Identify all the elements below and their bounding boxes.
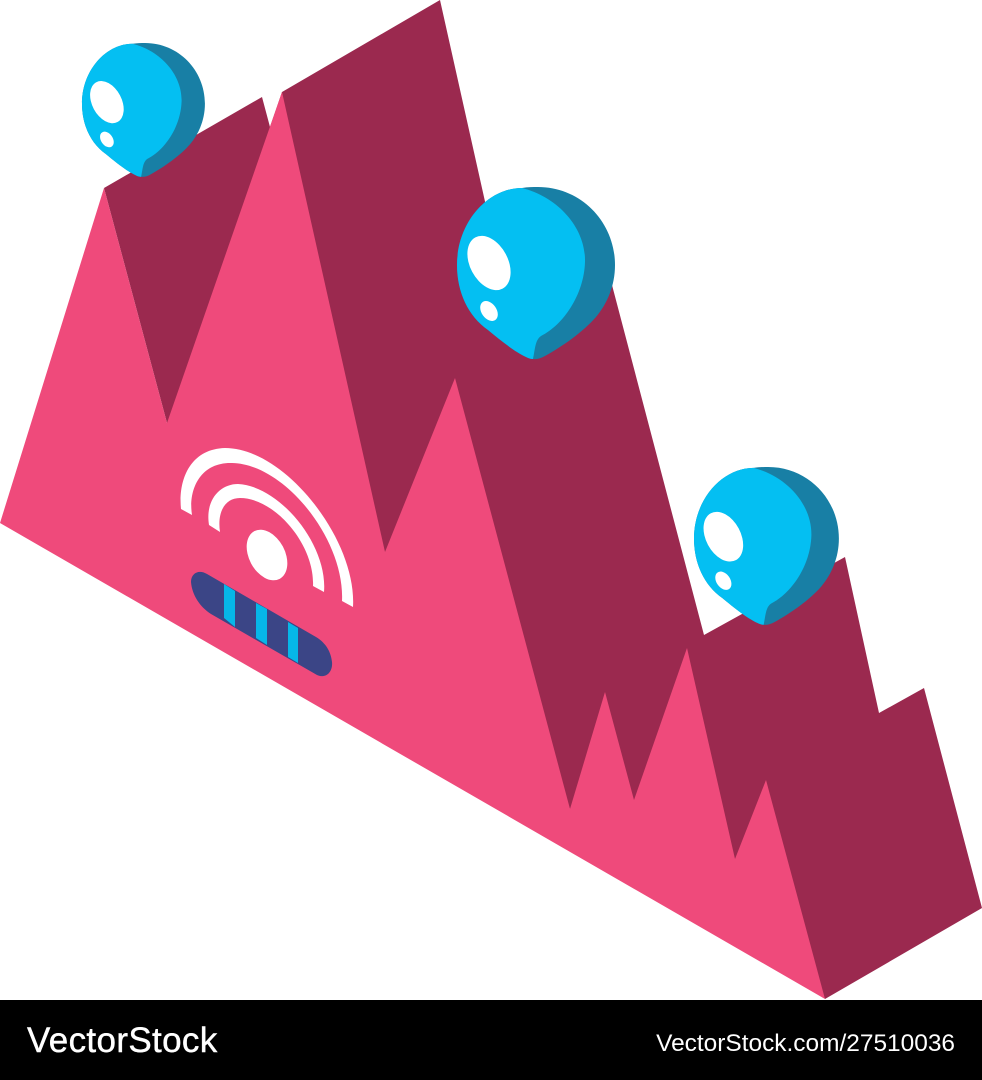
shadow side <box>457 187 615 359</box>
stripes <box>224 584 298 663</box>
icon: wifi signal <box>181 448 353 607</box>
image url: VectorStock.com/27510036 <box>656 1030 955 1057</box>
front <box>694 468 811 625</box>
highlights <box>459 228 519 324</box>
front <box>82 44 182 177</box>
bar body <box>191 572 332 676</box>
balloon marker 1 <box>82 43 205 177</box>
front <box>457 188 585 359</box>
balloon marker 2 <box>457 187 615 359</box>
shadow side <box>694 467 839 625</box>
middle arc <box>208 484 324 592</box>
balloon marker 3 <box>694 467 839 625</box>
centre dot <box>238 523 296 587</box>
chart front face: pink mountain <box>0 92 825 999</box>
highlights <box>83 75 131 150</box>
highlights <box>695 505 751 593</box>
footer bar <box>0 1000 982 1080</box>
outer arc <box>181 448 353 607</box>
logo wordmark: VectorStock <box>27 1021 218 1060</box>
icon: striped bar <box>191 572 332 676</box>
shadow side <box>82 43 205 177</box>
